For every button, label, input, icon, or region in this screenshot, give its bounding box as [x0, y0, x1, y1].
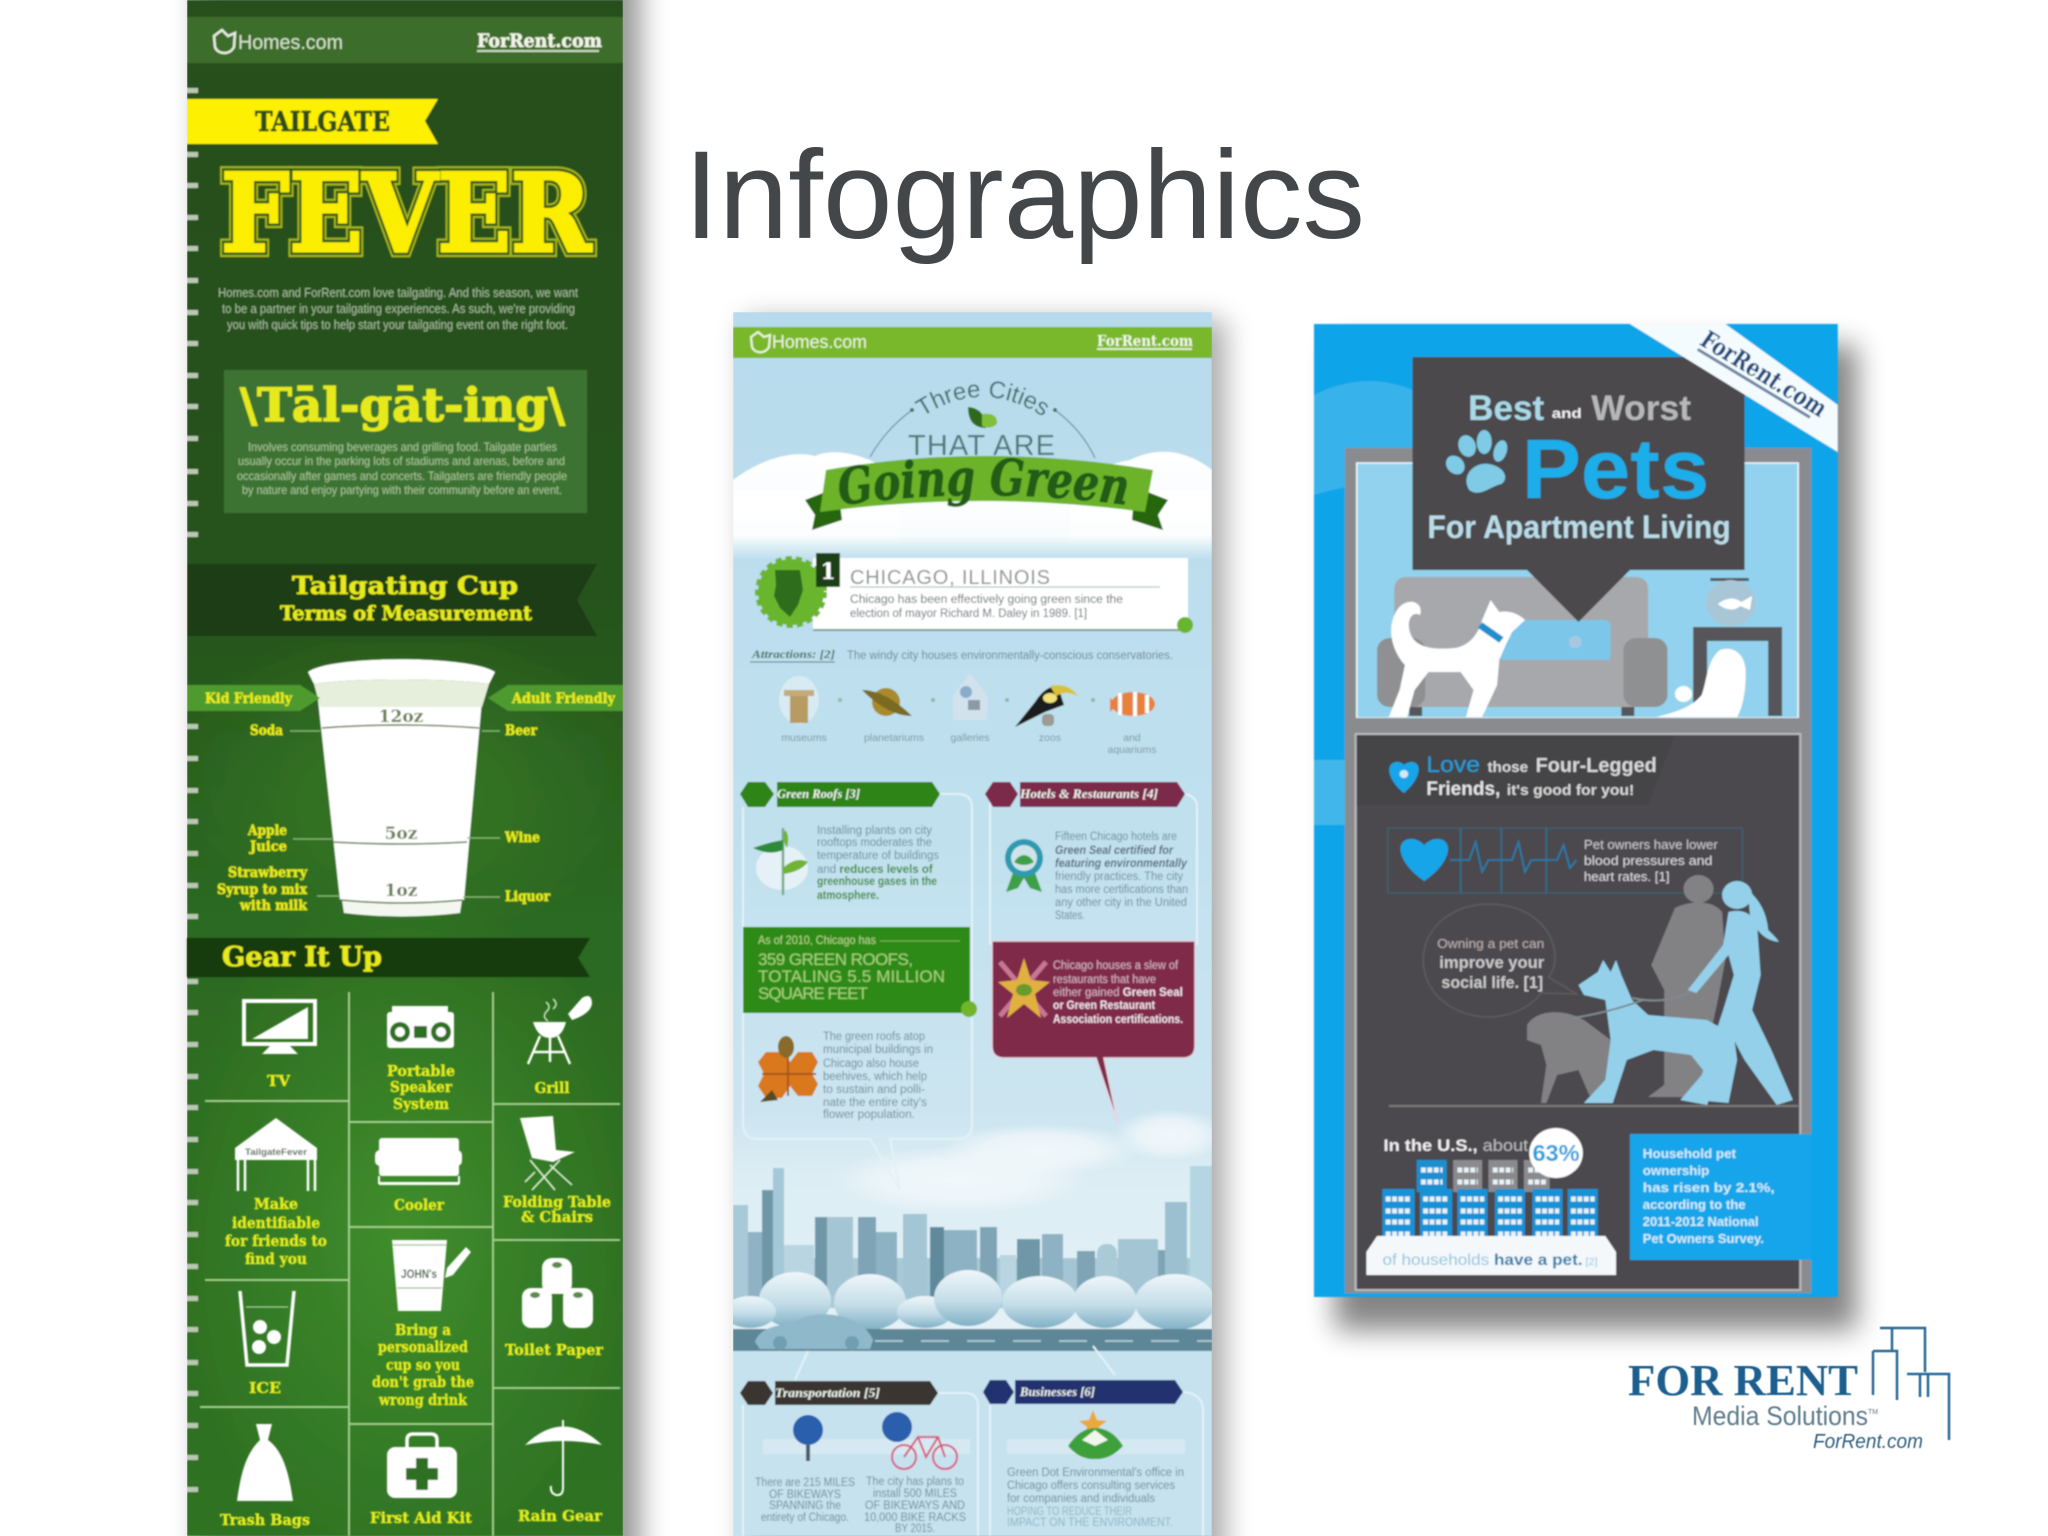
heart-rate strip: Pet owners have lower — [1584, 837, 1718, 852]
title speech box: Pets — [1522, 423, 1709, 516]
header band with logos: Homes.com — [238, 32, 343, 54]
label: adult friendly — [488, 685, 623, 711]
text: hotels: Green Seal certified for — [1055, 845, 1173, 857]
label: rain gear: Rain Gear — [518, 1507, 603, 1525]
silhouette: blue dog — [1579, 960, 1737, 1103]
icon: gallery — [953, 673, 987, 720]
intro text: Homes.com and ForRent.com love tailgating. And this season, we want — [218, 285, 578, 300]
speech outline: green roofs — [743, 794, 972, 1190]
text: beehives: to sustain and polli- — [823, 1084, 925, 1096]
header band with logos — [187, 17, 623, 63]
icon: museum column — [779, 676, 819, 724]
callout: restaurants — [992, 941, 1195, 1124]
callout: 359 green roofs: SQUARE FEET — [758, 984, 868, 1003]
section header: Chicago, Illinois: Chicago has been effectively going green since the — [850, 594, 1123, 606]
definition box — [224, 370, 587, 513]
icon: toilet paper — [522, 1258, 593, 1328]
silhouette: grey dog — [1527, 1012, 1611, 1103]
label: adult friendly: Adult Friendly — [511, 691, 616, 707]
section header: Chicago, Illinois — [758, 553, 1193, 633]
ribbon: Gear It Up — [187, 938, 590, 977]
heading: Three Cities That Are — [869, 380, 1096, 458]
silhouette: woman — [1680, 881, 1793, 1105]
header band with logos: ForRent.com — [477, 30, 602, 52]
ribbon: Tailgating Cup: Tailgating Cup — [292, 571, 518, 600]
label: portable speaker system: System — [393, 1095, 449, 1113]
definition box: occasionally after games and concerts. Tailgaters are friendly people — [237, 469, 567, 483]
label: make identifiable: identifiable — [232, 1214, 320, 1232]
text: bikeways: There are 215 MILES — [755, 1477, 855, 1489]
label: bring a personalized cup: wrong drink — [378, 1391, 468, 1409]
text: beehives: Chicago also house — [823, 1058, 919, 1070]
title speech box: Worst — [1591, 388, 1691, 428]
section pill: Hotels and Restaurants: Hotels & Restaurants [4] — [1019, 786, 1158, 801]
icon: personalized cup — [392, 1240, 471, 1311]
separator dots — [838, 698, 1095, 702]
icon: cooler — [375, 1138, 462, 1185]
callout: household pet ownership: 2011-2012 National — [1643, 1214, 1759, 1229]
drink labels: Soda — [250, 723, 283, 739]
logo: For Rent Media Solutions: FOR RENT — [1628, 1356, 1858, 1405]
icon: planet — [862, 688, 912, 716]
section header: Chicago, Illinois: CHICAGO, ILLINOIS — [850, 567, 1050, 589]
attractions line — [750, 647, 1173, 662]
heading: FEVER: FEVER — [221, 151, 592, 277]
definition box: usually occur in the parking lots of stadiums and arenas, before and — [238, 454, 565, 468]
heading: Love those four-legged friends: Four-Legged — [1536, 755, 1657, 777]
ribbon: Tailgating Cup — [187, 564, 597, 636]
banner: Going Green — [804, 455, 1168, 531]
side ruler ticks — [187, 88, 198, 1492]
heading: Love those four-legged friends: it's good for you! — [1507, 782, 1634, 799]
icon: fishbowl and table — [1693, 578, 1782, 716]
banner: Going Green: Going Green — [838, 457, 1128, 508]
icon: seedling — [753, 828, 808, 895]
heading: Love those four-legged friends: Friends, — [1426, 779, 1500, 800]
text: beehives: nate the entire city's — [823, 1097, 927, 1109]
speech bubble: social life: Owning a pet can — [1437, 936, 1544, 951]
logo: For Rent Media Solutions: Media Solutions — [1692, 1401, 1868, 1431]
leashes — [1573, 992, 1691, 1018]
label: portable speaker system: Portable — [387, 1062, 455, 1080]
text: green roofs intro: and reduces levels of — [817, 864, 933, 876]
speech outline: transportation — [743, 1351, 978, 1536]
section header: Chicago, Illinois: 1 — [820, 559, 836, 585]
heading: Love those four-legged friends: Love — [1426, 752, 1480, 777]
text: hotels: States. — [1055, 910, 1085, 922]
text: beehives — [823, 1031, 933, 1121]
icon: white cat — [1657, 649, 1746, 717]
text: beehives: municipal buildings in — [823, 1044, 933, 1056]
icon: umbrella — [525, 1420, 602, 1495]
callout: 359 green roofs: 359 GREEN ROOFS, — [758, 950, 913, 969]
speech outline: businesses — [990, 1346, 1203, 1536]
heading: FEVER — [219, 165, 598, 258]
label: make identifiable — [225, 1195, 327, 1268]
slide title: Infographics — [684, 126, 1365, 265]
intro text: you with quick tips to help start your tailgating event on the right foot. — [227, 317, 568, 332]
icon: paw — [1442, 430, 1510, 493]
attractions line: Attractions: [2] — [751, 647, 835, 661]
chart: cup measurement: 1oz — [385, 881, 418, 901]
callout: restaurants: or Green Restaurant — [1053, 1000, 1155, 1012]
icon: green business lotus — [1007, 1410, 1185, 1459]
chart: cup measurement: 12oz — [379, 707, 424, 727]
header band with logos: ForRent.com — [1097, 332, 1193, 350]
sofa — [1377, 577, 1667, 716]
heading: FEVER: FEVER — [221, 151, 592, 277]
icon: honeycomb and bee — [758, 1036, 818, 1102]
drink labels: with milk — [239, 898, 307, 914]
text: hotels: has more certifications than — [1055, 884, 1188, 896]
text: bikeways: BY 2015. — [895, 1523, 935, 1535]
label: folding table and chairs: & Chairs — [521, 1208, 593, 1226]
label: kid friendly: Kid Friendly — [205, 691, 293, 707]
intro text: to be a partner in your tailgating experiences. As such, we're providing — [222, 301, 575, 316]
drink labels: Strawberry — [228, 865, 308, 881]
callout: 359 green roofs: As of 2010, Chicago has — [758, 933, 876, 947]
callout: household pet ownership: according to the — [1643, 1197, 1746, 1212]
section header: Chicago, Illinois: election of mayor Richard M. Daley in 1989. [1] — [850, 608, 1087, 620]
text: beehives: beehives, which help — [823, 1071, 927, 1083]
section pill: Transportation: Transportation [5] — [775, 1385, 880, 1400]
text: green roofs intro: greenhouse gases in the — [817, 876, 937, 888]
drink labels: Beer — [505, 723, 538, 739]
label: bring a personalized cup: personalized — [378, 1338, 468, 1356]
icon: ice glass — [240, 1291, 294, 1365]
attraction captions: museums — [781, 732, 827, 744]
section pill: Transportation — [740, 1381, 938, 1405]
chart: cup measurement — [187, 659, 623, 916]
callout: restaurants: Association certifications. — [1053, 1014, 1183, 1026]
speech bubble: social life: improve your — [1439, 953, 1544, 972]
label: kid friendly — [187, 685, 320, 711]
label: folding table and chairs — [503, 1193, 611, 1226]
callout: restaurants: Chicago houses a slew of — [1053, 960, 1179, 972]
text: hotels — [1055, 831, 1188, 922]
title speech box — [1412, 357, 1745, 622]
icon: TV — [244, 1001, 315, 1054]
text: green dot environmental: for companies and individuals — [1007, 1493, 1155, 1505]
text: green roofs intro: temperature of buildings — [817, 850, 939, 862]
label: make identifiable: Make — [254, 1195, 298, 1213]
text: bikeways: 10,000 BIKE RACKS — [864, 1512, 966, 1524]
speech bubble: social life — [1423, 904, 1576, 1017]
icon: heart with paw — [1389, 762, 1419, 793]
icon: boombox — [387, 1006, 454, 1048]
ground line — [1389, 1105, 1798, 1107]
stat: 63% households: In the U.S., about — [1384, 1136, 1528, 1155]
text: bikeways: OF BIKEWAYS — [769, 1489, 841, 1501]
heading: Love those four-legged friends — [1426, 752, 1657, 800]
section pill: Green Roofs — [740, 782, 940, 807]
drink labels: Syrup to mix — [217, 882, 308, 898]
heading: Three Cities That Are: Three Cities — [914, 380, 1049, 416]
heading: Three Cities That Are: THAT ARE — [908, 430, 1055, 462]
label: portable speaker system: Speaker — [390, 1078, 453, 1096]
drink labels: Wine — [504, 830, 540, 846]
text: bikeways: SPANNING the — [769, 1500, 841, 1512]
speech outline: hotels — [990, 794, 1197, 945]
text: green dot environmental: Green Dot Environmental's office in — [1007, 1467, 1184, 1479]
logo: For Rent Media Solutions: ForRent.com — [1813, 1431, 1923, 1453]
yellow ribbon: Tailgate — [187, 99, 438, 144]
callout: household pet ownership: has risen by 2.1%, — [1643, 1180, 1775, 1195]
stat: 63% households — [1366, 1128, 1616, 1275]
label: first aid kit: First Aid Kit — [370, 1509, 472, 1527]
label: bring a personalized cup: Bring a — [395, 1321, 451, 1339]
title speech box: and — [1552, 406, 1582, 422]
window sill — [1345, 718, 1811, 732]
attraction captions: aquariums — [1107, 744, 1157, 756]
icon: grill — [528, 996, 592, 1064]
text: bikeways: entirety of Chicago. — [761, 1512, 849, 1524]
text: bikeways: install 500 MILES — [873, 1488, 957, 1500]
attractions line: The windy city houses environmentally-conscious conservatories. — [847, 650, 1173, 662]
label: make identifiable: for friends to — [225, 1232, 327, 1250]
intro text — [218, 285, 578, 332]
callout: household pet ownership — [1630, 1134, 1811, 1260]
label: grill: Grill — [534, 1079, 570, 1097]
icon: folding chair — [520, 1116, 575, 1190]
clouds behind title — [733, 452, 1212, 560]
text: green dot environmental: Chicago offers consulting services — [1007, 1480, 1175, 1492]
text: hotels: any other city in the United — [1055, 897, 1187, 909]
icon: clownfish — [1110, 692, 1155, 716]
callout: restaurants: either gained Green Seal — [1053, 987, 1183, 999]
logo: For Rent Media Solutions — [1628, 1328, 1949, 1453]
heading: FEVER: FEVER — [221, 151, 592, 277]
icon: white dog — [1389, 600, 1525, 717]
gear section — [200, 992, 620, 1536]
drink labels: Apple — [247, 823, 287, 839]
corner banner: ForRent.com: ForRent.com — [1695, 325, 1833, 422]
label: portable speaker system — [387, 1062, 455, 1113]
heading: Love those four-legged friends: those — [1487, 759, 1529, 776]
window scene — [1345, 463, 1811, 732]
definition box: \Tāl-gāt-ing\ — [240, 378, 565, 432]
definition box: Involves consuming beverages and grilling food. Tailgate parties — [248, 440, 557, 454]
text: bikeways: The city has plans to — [866, 1476, 964, 1488]
definition box: by nature and enjoy partying with their community before an event. — [242, 483, 562, 497]
text: hotels: friendly practices. The city — [1055, 871, 1183, 883]
panel: Three Cities Going Green infographic — [733, 312, 1212, 1536]
drink labels — [217, 723, 551, 914]
text: green roofs intro: rooftops moderates the — [817, 837, 932, 849]
text: green dot environmental: HOPING TO REDUCE THEIR — [1007, 1506, 1132, 1518]
panel: Tailgate Fever infographic — [165, 0, 645, 1536]
section pill: Businesses: Businesses [6] — [1019, 1384, 1095, 1399]
text: hotels: featuring environmentally — [1055, 858, 1188, 870]
text: hotels: Fifteen Chicago hotels are — [1055, 831, 1177, 843]
label: folding table and chairs: Folding Table — [503, 1193, 611, 1211]
icon: green seal ribbon — [1005, 839, 1043, 892]
logo: For Rent Media Solutions: TM — [1868, 1409, 1878, 1416]
yellow ribbon: Tailgate: TAILGATE — [255, 107, 390, 138]
attraction captions: and — [1123, 732, 1141, 744]
attraction captions: galleries — [950, 732, 990, 744]
drink labels: Liquor — [505, 889, 551, 905]
label: make identifiable: find you — [245, 1250, 307, 1268]
attraction captions: planetariums — [864, 732, 924, 744]
callout: 359 green roofs: TOTALING 5.5 MILLION — [758, 967, 945, 986]
icon: tent: TailgateFever — [245, 1147, 308, 1157]
dark info panel — [1356, 734, 1800, 1290]
heart-rate strip — [1388, 828, 1742, 893]
text: green dot environmental — [1007, 1467, 1184, 1529]
callout: household pet ownership: Household pet — [1643, 1146, 1737, 1161]
speech bubble: social life: social life. [1] — [1441, 973, 1543, 992]
panel: Best and Worst Pets infographic — [1314, 324, 1838, 1297]
title speech box: For Apartment Living — [1427, 510, 1731, 546]
label: ice: ICE — [249, 1379, 281, 1397]
icon: personalized cup: JOHN's — [401, 1267, 437, 1281]
stat: 63% households: of households have a pet. [2] — [1382, 1251, 1598, 1269]
callout: 359 green roofs — [743, 927, 977, 1017]
text: green roofs intro: atmosphere. — [817, 890, 879, 902]
drink labels: Juice — [248, 839, 287, 855]
ribbon: Tailgating Cup: Terms of Measurement — [280, 601, 533, 625]
label: bring a personalized cup — [372, 1321, 474, 1409]
heart-rate strip: heart rates. [1] — [1584, 869, 1670, 884]
icon: logo building lines — [1873, 1328, 1949, 1440]
icon: toucan — [1015, 685, 1078, 727]
chart: cup measurement: 5oz — [385, 824, 418, 844]
skyline with road — [724, 1109, 1225, 1536]
text: beehives: The green roofs atop — [823, 1031, 925, 1043]
text: beehives: flower population. — [823, 1109, 915, 1121]
icon: trash bag — [237, 1424, 293, 1501]
icon: first aid kit — [387, 1434, 457, 1498]
ribbon: Gear It Up: Gear It Up — [222, 942, 382, 973]
icon: bike signs — [763, 1412, 970, 1469]
attraction captions: zoos — [1039, 732, 1061, 744]
label: bring a personalized cup: don't grab the — [372, 1373, 474, 1391]
heart-rate strip: blood pressures and — [1584, 853, 1712, 868]
callout: household pet ownership: Pet Owners Survey. — [1643, 1231, 1764, 1246]
label: bring a personalized cup: cup so you — [386, 1356, 460, 1374]
label: cooler: Cooler — [394, 1196, 445, 1214]
stat: 63% households: 63% — [1532, 1141, 1580, 1167]
silhouette: man — [1648, 875, 1725, 1097]
text: bikeways: OF BIKEWAYS AND — [865, 1500, 965, 1512]
building frame — [1345, 448, 1811, 1293]
icon: tent — [235, 1118, 317, 1191]
section pill: Green Roofs: Green Roofs [3] — [777, 786, 860, 801]
label: TV: TV — [267, 1072, 290, 1090]
section pill: Hotels and Restaurants — [985, 782, 1185, 807]
text: bikeways — [755, 1476, 966, 1535]
header band with logos — [733, 327, 1212, 358]
text: green roofs intro — [817, 825, 939, 902]
attraction captions — [781, 732, 1157, 756]
corner banner: ForRent.com — [1630, 324, 1838, 452]
text: green roofs intro: Installing plants on city — [817, 825, 932, 837]
title speech box: Best — [1468, 388, 1544, 428]
section pill: Businesses — [983, 1380, 1183, 1404]
label: trash bags: Trash Bags — [220, 1511, 310, 1529]
text: green dot environmental: IMPACT ON THE ENVIRONMENT. — [1007, 1517, 1173, 1529]
callout: restaurants: restaurants that have — [1053, 974, 1156, 986]
header band with logos: Homes.com — [772, 332, 867, 352]
label: toilet paper: Toilet Paper — [505, 1341, 604, 1359]
gear grid lines — [200, 992, 620, 1536]
callout: household pet ownership: ownership — [1643, 1163, 1709, 1178]
